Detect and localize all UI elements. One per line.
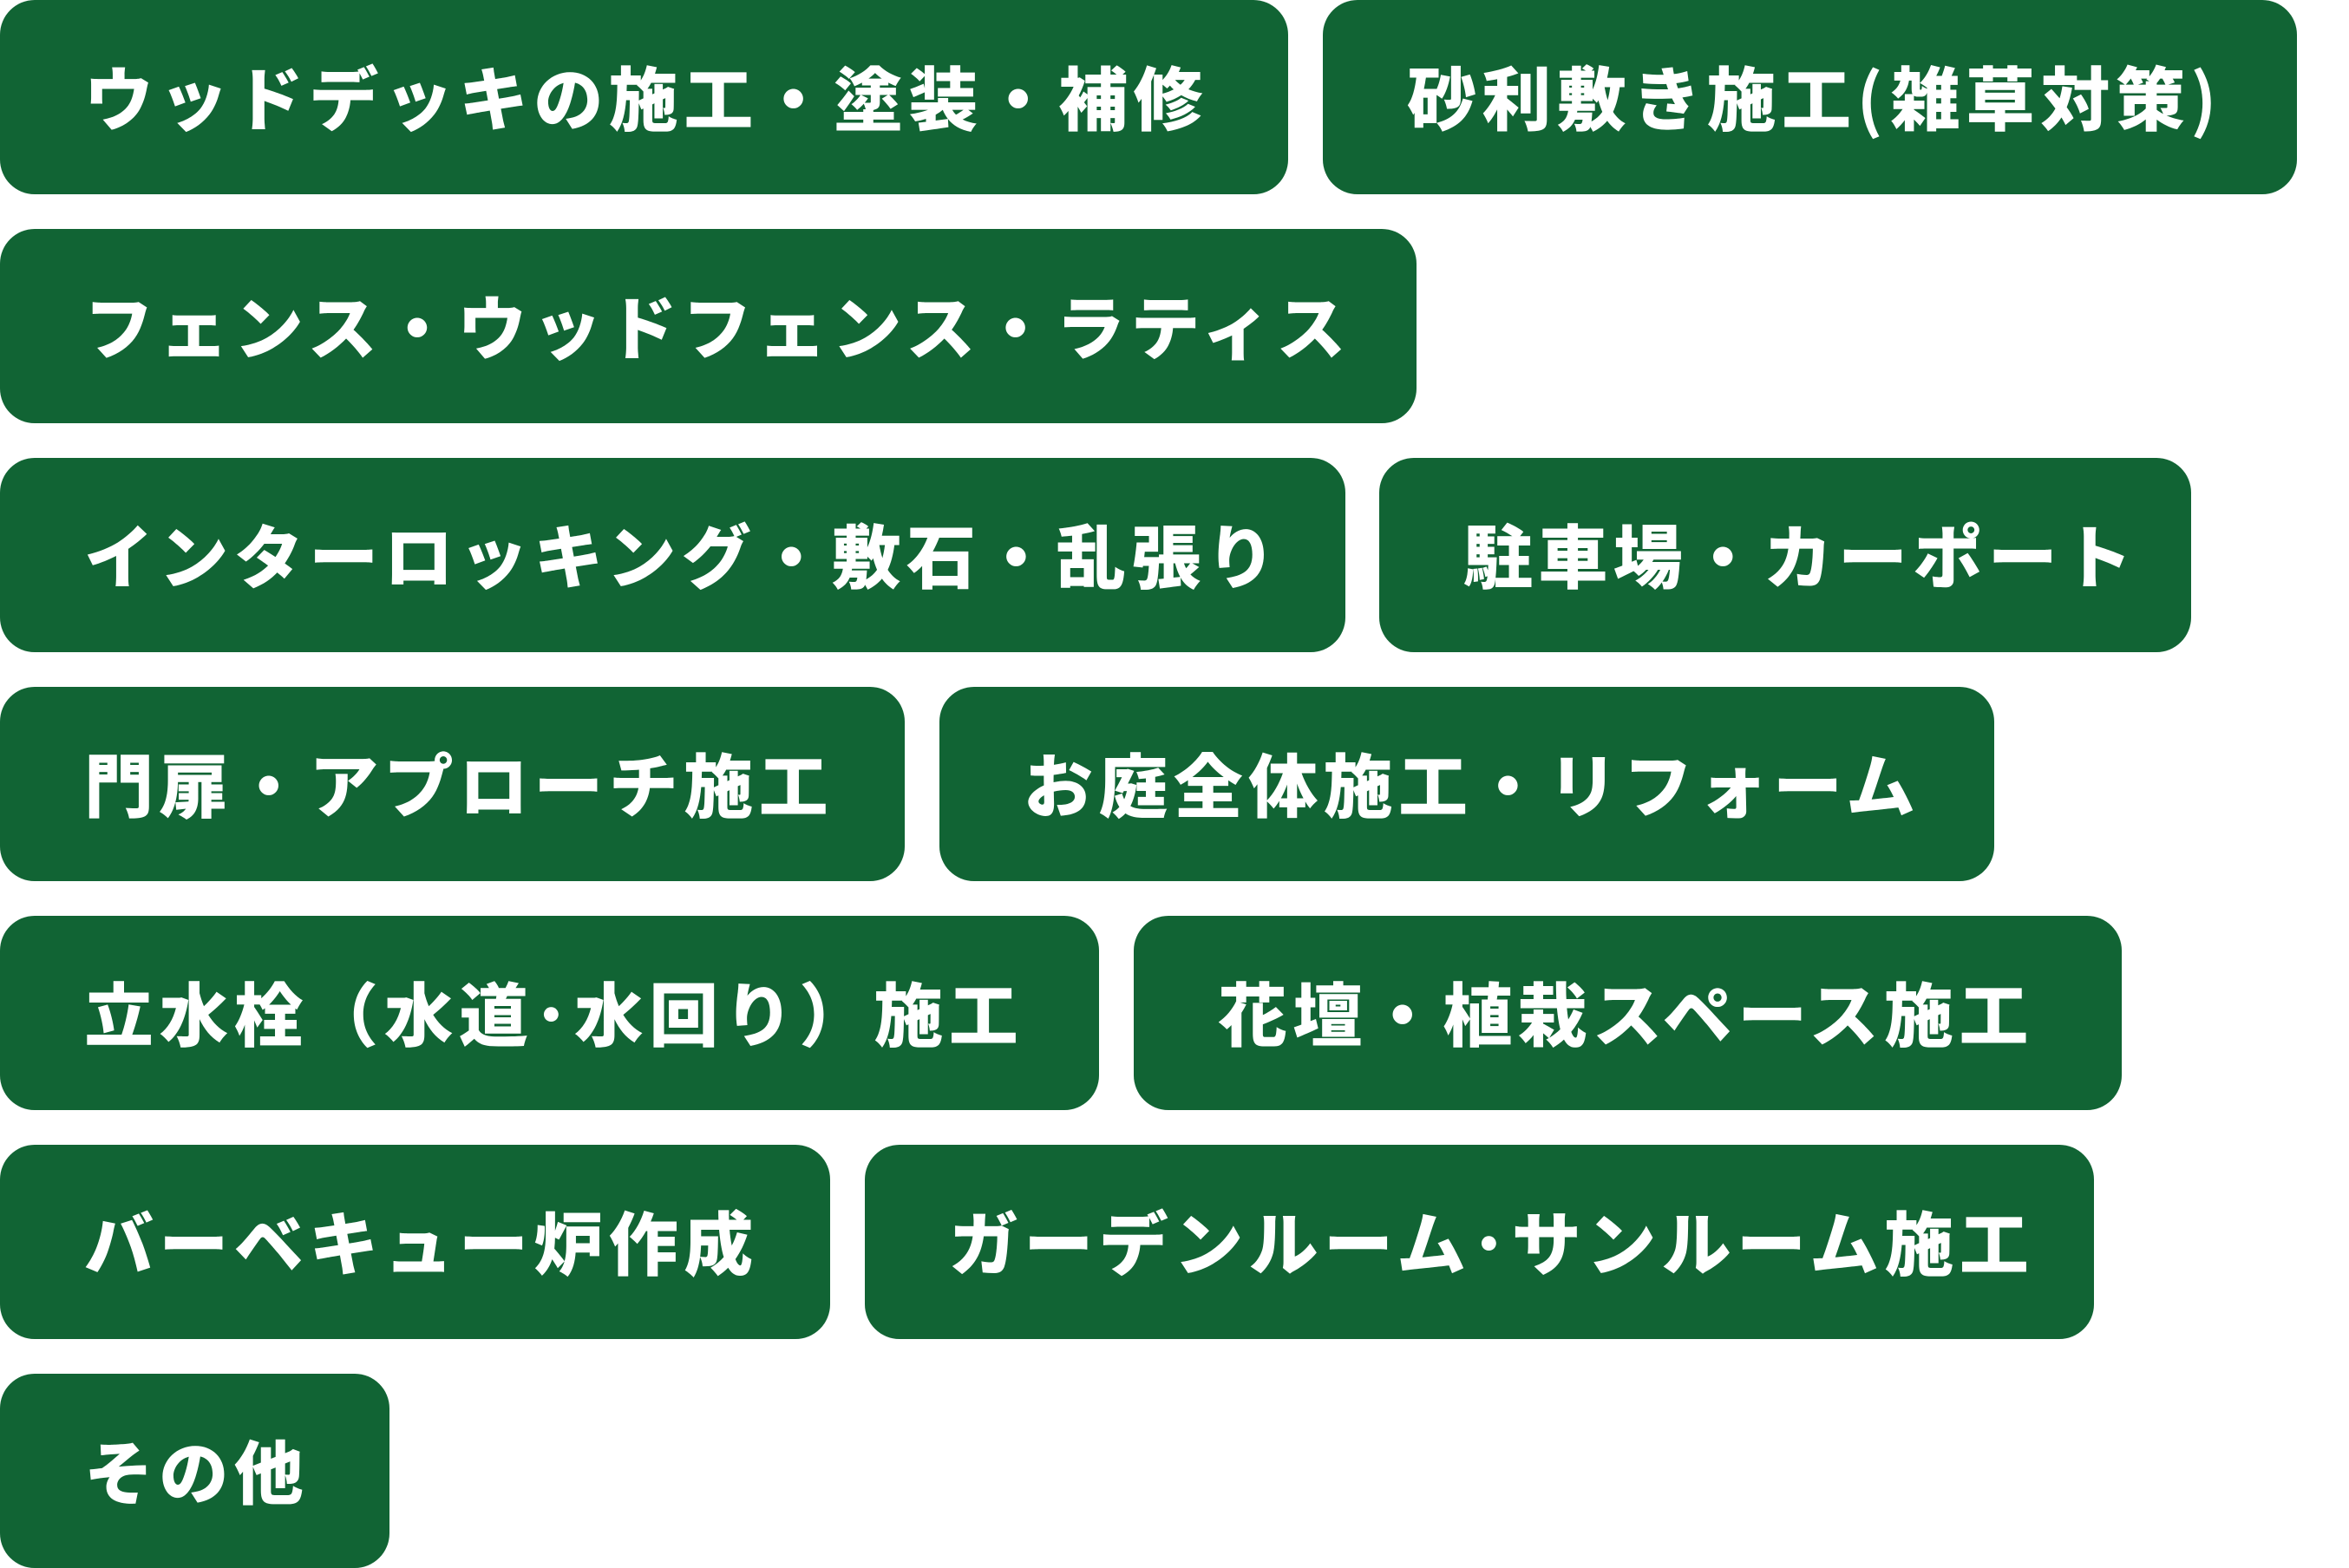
label: wood deck: ウッドデッキの施工・塗装・補修 (84, 62, 1208, 140)
tag: interlocking (0, 458, 1345, 652)
tag: parking (1379, 458, 2191, 652)
tag: gate (0, 687, 905, 881)
tag: wood deck (0, 0, 1288, 194)
label: barbecue: バーベキュー炉作成 (84, 1207, 759, 1284)
tag: fence (0, 229, 1417, 423)
label: other: その他 (84, 1436, 309, 1513)
label: whole garden: お庭全体施工・リフォーム (1024, 749, 1920, 826)
label: water post: 立水栓（水道･水回り）施工 (84, 978, 1024, 1055)
label: gravel: 砂利敷き施工(雑草対策) (1407, 45, 2225, 146)
tag: barbecue (0, 1145, 830, 1339)
tag: gravel (1323, 0, 2297, 194)
label: parking: 駐車場・カーポート (1463, 520, 2138, 598)
label: garden room: ガーデンルーム･サンルーム施工 (949, 1207, 2034, 1284)
label: interlocking: インターロッキング・敷石・乱張り (84, 520, 1281, 598)
tag: flower bed (1134, 916, 2122, 1110)
label: gate: 門扉・アプローチ施工 (84, 749, 834, 826)
label: fence: フェンス・ウッドフェンス・ラティス (84, 291, 1351, 369)
tag: water post (0, 916, 1099, 1110)
tag: other (0, 1374, 389, 1568)
tag: whole garden (939, 687, 1994, 881)
label: flower bed: 花壇・植栽スペース施工 (1218, 978, 2034, 1055)
tag: garden room (865, 1145, 2094, 1339)
